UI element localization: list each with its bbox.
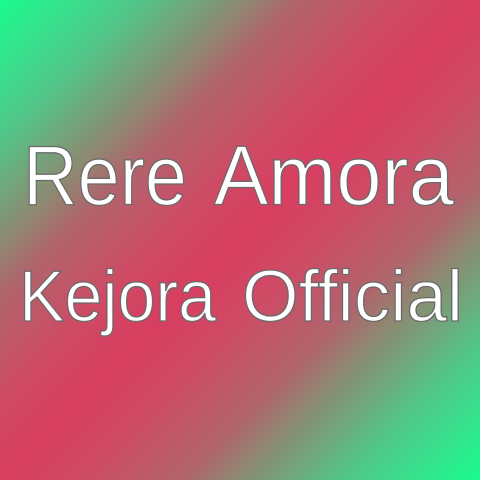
subtitle: song title: Kejora	[19, 257, 217, 337]
title: artist name: Amora	[214, 128, 454, 222]
subtitle: song title	[19, 257, 463, 337]
subtitle: song title: Official	[242, 257, 463, 337]
title: artist name: Rere	[23, 128, 187, 222]
title: artist name	[23, 128, 454, 222]
